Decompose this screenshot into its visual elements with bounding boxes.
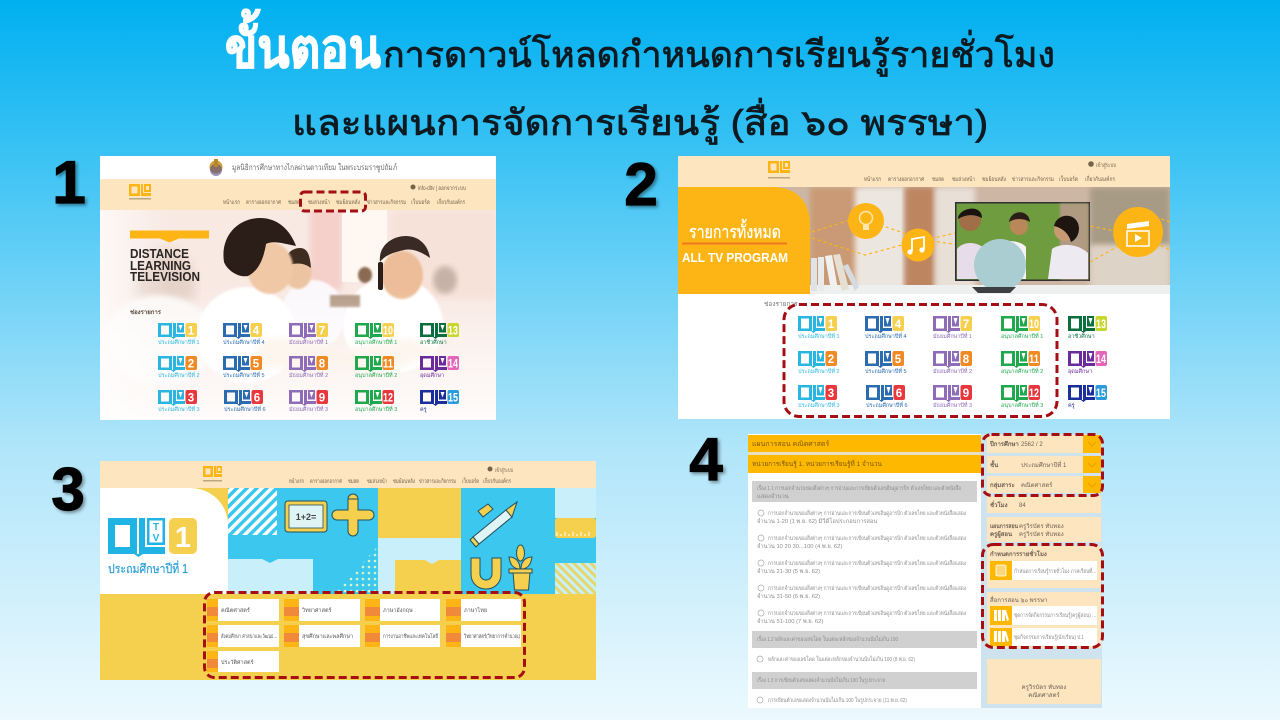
lesson 6 [757, 655, 915, 663]
navigation menu: ชมสด [932, 176, 944, 183]
subject: history: ประวัติศาสตร์ [221, 659, 254, 666]
topic 1.3 header [752, 672, 977, 689]
channels heading: ช่องรายการ [764, 301, 798, 308]
subject cards [207, 599, 521, 672]
navigation menu: ตารางออกอากาศ [310, 478, 342, 485]
hours field: ชั่วโมง [990, 500, 1008, 509]
channel 6: 6 [896, 388, 902, 400]
channel 3 [158, 390, 200, 413]
lesson 4 [757, 584, 966, 600]
site logo [129, 184, 151, 200]
channel 5: ประถมศึกษาปีที่ 5 [223, 371, 265, 379]
chalkboard icon: 1+2= [296, 512, 316, 522]
hero banner [678, 187, 1170, 294]
channel 14: อุดมศึกษา [420, 372, 444, 379]
colourful hero [228, 488, 596, 594]
channel 1: 1 [828, 319, 835, 331]
panel: step 1 website home [100, 156, 496, 420]
channel 10 [355, 323, 397, 346]
channel 1: ประถมศึกษาปีที่ 1 [158, 338, 200, 346]
title [225, 9, 1055, 145]
distance learning television wordmark: LEARNING [130, 259, 191, 273]
channel 4: 4 [253, 326, 260, 338]
channel 8: มัธยมศึกษาปีที่ 2 [933, 367, 972, 375]
channel 4: ประถมศึกษาปีที่ 4 [865, 332, 907, 340]
channel 14: 14 [1096, 354, 1106, 366]
title line 1 white lead word: ขั้นตอน [225, 9, 381, 79]
lesson 3 [757, 559, 966, 575]
channel 15 [1068, 385, 1107, 409]
navigation menu: ชมย้อนหลัง [982, 176, 1006, 183]
navigation menu: ชมย้อนหลัง [393, 478, 415, 485]
site logo [768, 161, 790, 178]
navigation menu: หน้าแรก [864, 176, 881, 183]
channel logo grid [158, 323, 459, 413]
login link: เข้าสู่ระบบ [495, 467, 513, 474]
magnet icon [471, 558, 501, 589]
topic 1.1 header [752, 481, 977, 502]
peach nav band [100, 461, 596, 488]
channel 2: 2 [828, 354, 834, 366]
orange title block [678, 187, 810, 294]
lesson 4: การบอกจำนวนของสิ่งต่างๆ การอ่านและการเขียนตัวเลขฮินดูอารบิก ตัวเลขไทย และตัวหนังสือแสดง [768, 584, 966, 592]
navigation menu: ข่าวสารและกิจกรรม [419, 478, 456, 485]
subject: mathematics: คณิตศาสตร์ [221, 607, 250, 614]
channel 2 [158, 356, 200, 379]
subject: thai: ภาษาไทย [464, 607, 487, 614]
panel: step 2 all programs [678, 156, 1170, 419]
channel 13: 13 [1096, 319, 1106, 331]
channel 9: มัธยมศึกษาปีที่ 3 [289, 405, 328, 413]
teachers box: ครูวิรบัตร ทับทอง [1019, 523, 1064, 530]
subject: social studies: สังคมศึกษา ศาสนาและวัฒนธ... [221, 633, 277, 640]
channel 7 [933, 316, 972, 340]
distance learning television wordmark: TELEVISION [130, 270, 200, 284]
lesson 7: การเขียนตัวเลขแสดงจำนวนนับไม่เกิน 100 ในรูปกระจาย (11 พ.ย. 62) [768, 696, 907, 704]
grade label: ประถมศึกษาปีที่ 1 [108, 560, 188, 576]
channel 5 [223, 356, 265, 379]
subject: science: วิทยาศาสตร์ [301, 607, 332, 614]
panel: step 3 grade page [100, 461, 596, 680]
channel 1: 1 [188, 326, 195, 338]
subject field: คณิตศาสตร์ [1021, 481, 1053, 489]
grade field: ชั้น [990, 459, 999, 469]
channel 13 [420, 323, 459, 346]
channel 5: 5 [895, 354, 902, 366]
channel 2: ประถมศึกษาปีที่ 2 [158, 371, 200, 379]
navigation menu: ชมล่วงหน้า [952, 176, 975, 183]
channel 4 [223, 323, 265, 346]
channel 12: 12 [1029, 388, 1039, 400]
subject: mathematics [207, 599, 279, 621]
teacher footer box: ครูวิรบัตร ทับทอง [1022, 684, 1066, 691]
navigation menu: เกี่ยวกับองค์กร [483, 477, 512, 485]
navigation menu: หน้าแรก [223, 199, 240, 206]
topic 1.3 header: เรื่อง 1.3 การเขียนตัวเลขแสดงจำนวนนับไม่เกิน 100 ในรูปกระจาย [757, 676, 885, 684]
topic 1.2 header: เรื่อง 1.2 หลักและค่าของเลขโดด ในแต่ละหลักของจำนวนนับไม่เกิน 100 [757, 635, 898, 643]
lesson 2: จำนวน 10 20 30...100 (4 พ.ย. 62) [757, 543, 842, 550]
orange underline [682, 242, 787, 244]
dashed highlight on channels [784, 304, 1057, 416]
white logo block [100, 488, 228, 594]
navigation menu: ชมสด [348, 478, 359, 485]
subject: occupations [365, 625, 440, 647]
channel 5: ประถมศึกษาปีที่ 5 [865, 367, 907, 375]
teaching media box: ชุดกิจกรรมการเรียนรู้(นักเรียน) ป.1 [1014, 633, 1084, 641]
channel 10: 10 [1029, 319, 1039, 331]
navigation menu: เกี่ยวกับองค์กร [437, 198, 466, 206]
step number 2: 2 [624, 151, 658, 218]
grade 1 logo: V [153, 533, 160, 544]
login link [1088, 161, 1116, 169]
all programs heading: รายการทั้งหมด [689, 219, 781, 242]
subject field: กลุ่มสาระ [990, 482, 1015, 489]
chalkboard icon [285, 501, 327, 532]
channel 8: มัธยมศึกษาปีที่ 2 [289, 371, 328, 379]
channel 6: 6 [254, 392, 260, 404]
peach nav band [100, 179, 496, 210]
title line 2: และแผนการจัดการเรียนรู้ (สื่อ ๖๐ พรรษา) [292, 98, 988, 145]
channel 12: อนุบาลศึกษาปีที่ 3 [1001, 401, 1043, 409]
music icon [902, 228, 934, 262]
user links [410, 184, 466, 192]
channel 12 [1001, 385, 1043, 409]
channel 3: 3 [828, 388, 834, 400]
channel 2: 2 [188, 358, 194, 370]
channel 1 [798, 316, 840, 340]
navigation menu: ตารางออกอากาศ [888, 176, 924, 183]
channel 15: ครู [1068, 403, 1075, 409]
pencil icon [470, 502, 517, 547]
navigation menu: ตารางออกอากาศ [246, 199, 281, 206]
channel 15: ครู [420, 407, 427, 413]
subject: history [207, 651, 279, 672]
lesson 3: การบอกจำนวนของสิ่งต่างๆ การอ่านและการเขียนตัวเลขฮินดูอารบิก ตัวเลขไทย และตัวหนังสือแสดง [768, 559, 966, 567]
peach nav band [678, 156, 1170, 187]
navigation menu: ชมล่วงหน้า [367, 478, 387, 485]
teaching media box: ชุดการจัดกิจกรรมการเรียนรู้(ครูผู้สอน) ... [1014, 611, 1096, 619]
unit orange heading: หน่วยการเรียนรู้ 1. หน่วยการเรียนรู้ที่ 1 จำนวน [752, 459, 883, 468]
navigation menu [864, 174, 1116, 183]
channel 10 [1001, 316, 1043, 340]
channel 12: อนุบาลศึกษาปีที่ 3 [355, 405, 397, 413]
video icon [1113, 207, 1163, 257]
channel 7: 7 [319, 326, 325, 338]
grade 1 logo [108, 518, 197, 557]
lesson 5: จำนวน 51-100 (7 พ.ย. 62) [757, 618, 823, 625]
channel 3: ประถมศึกษาปีที่ 3 [798, 401, 840, 409]
grade 1 logo: 1 [175, 522, 191, 554]
teacher footer box [987, 659, 1101, 704]
grade field [987, 456, 1101, 473]
channel 10: 10 [383, 326, 393, 338]
channel 13 [1068, 316, 1107, 340]
channel 9: 9 [963, 388, 969, 400]
channel 9 [933, 385, 972, 409]
hours field [987, 496, 1101, 513]
lesson 3: จำนวน 21-30 (5 พ.ย. 62) [757, 568, 820, 575]
academic year field [987, 435, 1101, 453]
channel 14 [420, 356, 459, 379]
channel 8 [289, 356, 328, 379]
distance learning television wordmark: DISTANCE [130, 247, 189, 261]
channel 8: 8 [963, 354, 970, 366]
channel 11: อนุบาลศึกษาปีที่ 2 [1001, 367, 1043, 375]
television with students [955, 202, 1090, 291]
subject: occupations: การงานอาชีพและเทคโนโลยี [383, 632, 438, 640]
channel 13: อาชีวศึกษา [420, 339, 447, 346]
login link [488, 466, 513, 474]
site logo [203, 466, 222, 482]
channel 15: 15 [448, 392, 458, 404]
dashed highlight on subjects [204, 592, 524, 678]
lesson 5: การบอกจำนวนของสิ่งต่างๆ การอ่านและการเขียนตัวเลขฮินดูอารบิก ตัวเลขไทย และตัวหนังสือแสดง [768, 609, 966, 617]
channel 9 [289, 390, 328, 413]
channel 8 [933, 351, 972, 375]
channel 12: 12 [383, 392, 393, 404]
television stand [972, 287, 1016, 293]
channel 6 [224, 390, 266, 413]
books [811, 254, 859, 291]
subject field [987, 476, 1101, 493]
unit orange heading [748, 452, 981, 473]
dashed highlight on downloads [982, 544, 1102, 648]
topic 1.2 header [752, 631, 977, 648]
subject: computing science: วิทยาศาสตร์(วิทยาการคำนวณ) [463, 633, 520, 640]
teachers box: แผนการสอน [990, 523, 1019, 530]
lesson 7 [757, 696, 907, 704]
channel 13: อาชีวศึกษา [1068, 333, 1095, 340]
step number 1: 1 [52, 149, 86, 216]
channel 4: ประถมศึกษาปีที่ 4 [223, 338, 265, 346]
lesson 4: จำนวน 31-50 (6 พ.ย. 62) [757, 593, 820, 600]
channel 1 [158, 323, 200, 346]
lesson 2: การบอกจำนวนของสิ่งต่างๆ การอ่านและการเขียนตัวเลขฮินดูอารบิก ตัวเลขไทย และตัวหนังสือแสดง [768, 534, 966, 542]
channel 12 [355, 390, 397, 413]
academic year field: 2562 / 2 [1021, 442, 1043, 448]
dashed connector lines [812, 215, 1170, 265]
channel 11 [355, 356, 397, 379]
lesson 1 [757, 509, 966, 525]
channel 15 [420, 390, 459, 413]
plus icon [332, 494, 374, 536]
navigation menu: เว็บบอร์ด [411, 197, 430, 206]
subject: thai [446, 599, 521, 621]
channel 14: 14 [448, 358, 458, 370]
channel 11: อนุบาลศึกษาปีที่ 2 [355, 371, 397, 379]
channel 3: ประถมศึกษาปีที่ 3 [158, 405, 200, 413]
grade field: ประถมศึกษาปีที่ 1 [1021, 461, 1067, 469]
hourly schedule box: กำหนดการรายชั่วโมง [990, 549, 1047, 558]
subject: english [365, 599, 440, 621]
navigation menu: ข่าวสารและกิจกรรม [367, 199, 406, 206]
navigation menu: ชมย้อนหลัง [336, 199, 360, 206]
teachers box: ครูวิรบัตร ทับทอง [1019, 531, 1064, 538]
channel 15: 15 [1096, 388, 1106, 400]
navigation menu: ข่าวสารและกิจกรรม [1012, 176, 1054, 183]
channel 10: อนุบาลศึกษาปีที่ 1 [355, 338, 397, 346]
plant icon [509, 545, 532, 590]
channel 6: ประถมศึกษาปีที่ 6 [224, 405, 266, 413]
lesson 1: จำนวน 1-20 (1 พ.ย. 62) มีวีดีโอประกอบการสอน [757, 517, 877, 525]
teaching media box: สื่อการสอน ๖๐ พรรษา [990, 596, 1047, 604]
navigation menu: ชมล่วงหน้า [308, 199, 330, 206]
subject: health: สุขศึกษาและพลศึกษา [302, 633, 353, 640]
subject: english: ภาษาอังกฤษ [383, 607, 413, 614]
panel: step 4 lesson plan list [748, 434, 981, 708]
step number 4: 4 [689, 426, 723, 493]
channel 9: 9 [319, 392, 325, 404]
navigation menu [289, 476, 512, 485]
open book mark [130, 230, 209, 242]
bulb icon [848, 203, 884, 239]
channel 1: ประถมศึกษาปีที่ 1 [798, 332, 840, 340]
subject: computing science [446, 625, 521, 647]
hourly schedule box [987, 546, 1101, 588]
navigation menu: เว็บบอร์ด [462, 476, 479, 485]
distance learning television wordmark [130, 247, 200, 284]
subject: health [284, 625, 360, 647]
navigation menu: หน้าแรก [289, 478, 304, 485]
channel logo grid [798, 316, 1107, 409]
channel 3 [798, 385, 840, 409]
topic 1.1 header: เรื่อง 1.1 การบอกจำนวนของสิ่งต่างๆ การอ่านและการเขียนตัวเลขฮินดูอารบิก ตัวเลขไทย และตัวหนังสือ [757, 484, 961, 492]
channel 14 [1068, 351, 1107, 375]
channel 13: 13 [448, 326, 458, 338]
channel 2 [798, 351, 840, 375]
hero photo of students [100, 210, 496, 396]
channel 7 [289, 323, 328, 346]
channel 4 [865, 316, 907, 340]
lesson 5 [757, 609, 966, 625]
teachers box: ครูผู้สอน [990, 530, 1013, 539]
teacher footer box: คณิตศาสตร์ [1028, 691, 1060, 699]
channel 8: 8 [319, 358, 326, 370]
lesson 1: การบอกจำนวนของสิ่งต่างๆ การอ่านและการเขียนตัวเลขฮินดูอารบิก ตัวเลขไทย และตัวหนังสือแสดง [768, 509, 966, 517]
teachers box [987, 517, 1101, 542]
channel 5 [865, 351, 907, 375]
channel 11: 11 [1029, 354, 1039, 366]
channel 5: 5 [253, 358, 260, 370]
navigation menu: เกี่ยวกับองค์กร [1085, 175, 1116, 183]
teaching media box [987, 592, 1101, 648]
academic year field: ปีการศึกษา [989, 440, 1019, 448]
lesson 6: หลักและค่าของเลขโดด ในแต่ละหลักของจำนวนนับไม่เกิน 100 (8 พ.ย. 62) [768, 655, 915, 663]
subject: social studies [207, 625, 279, 647]
grade 1 logo: T [153, 522, 159, 533]
foundation heading: มูลนิธิการศึกษาทางไกลผ่านดาวเทียม ในพระบรมราชูปถัมภ์ [232, 162, 397, 173]
channel 11 [1001, 351, 1043, 375]
panel: step 4 sidebar [981, 434, 1102, 708]
channel 9: มัธยมศึกษาปีที่ 3 [933, 401, 972, 409]
hours field: 84 [1019, 503, 1026, 509]
channel 7: มัธยมศึกษาปีที่ 1 [289, 338, 328, 346]
dashed highlight on nav [300, 192, 366, 211]
title line 1: การดาวน์โหลดกำหนดการเรียนรู้รายชั่วโมง [383, 30, 1055, 77]
all tv program label: ALL TV PROGRAM [682, 250, 788, 265]
channel 14: อุดมศึกษา [1068, 368, 1092, 375]
dashed highlight on filters [982, 434, 1102, 496]
navigation menu: ชมสด [288, 199, 300, 206]
foundation emblem [210, 159, 222, 176]
login link: เข้าสู่ระบบ [1096, 162, 1116, 169]
lesson plan orange heading: แผนการสอน คณิตศาสตร์ [752, 440, 829, 448]
navigation menu [223, 197, 466, 206]
channel 10: อนุบาลศึกษาปีที่ 1 [1001, 332, 1043, 340]
channels heading: ช่องรายการ [130, 309, 162, 316]
channel 7: 7 [963, 319, 969, 331]
channel 6 [866, 385, 908, 409]
channel 4: 4 [895, 319, 902, 331]
channel 7: มัธยมศึกษาปีที่ 1 [933, 332, 972, 340]
lesson plan orange heading [748, 435, 981, 452]
topic 1.1 header: แสดงจำนวน [757, 493, 789, 500]
lesson 2 [757, 534, 966, 550]
navigation menu: เว็บบอร์ด [1059, 174, 1078, 183]
channel 6: ประถมศึกษาปีที่ 6 [866, 401, 908, 409]
subject: science [284, 599, 360, 621]
channel 11: 11 [383, 358, 393, 370]
step number 3: 3 [51, 456, 85, 523]
channel 3: 3 [188, 392, 194, 404]
hourly schedule box: กำหนดการเรียนรู้รายชั่วโมง ภาคเรียนที่... [1014, 567, 1096, 575]
user links: info-dltv | ออกจากระบบ [418, 185, 466, 192]
channel 2: ประถมศึกษาปีที่ 2 [798, 367, 840, 375]
